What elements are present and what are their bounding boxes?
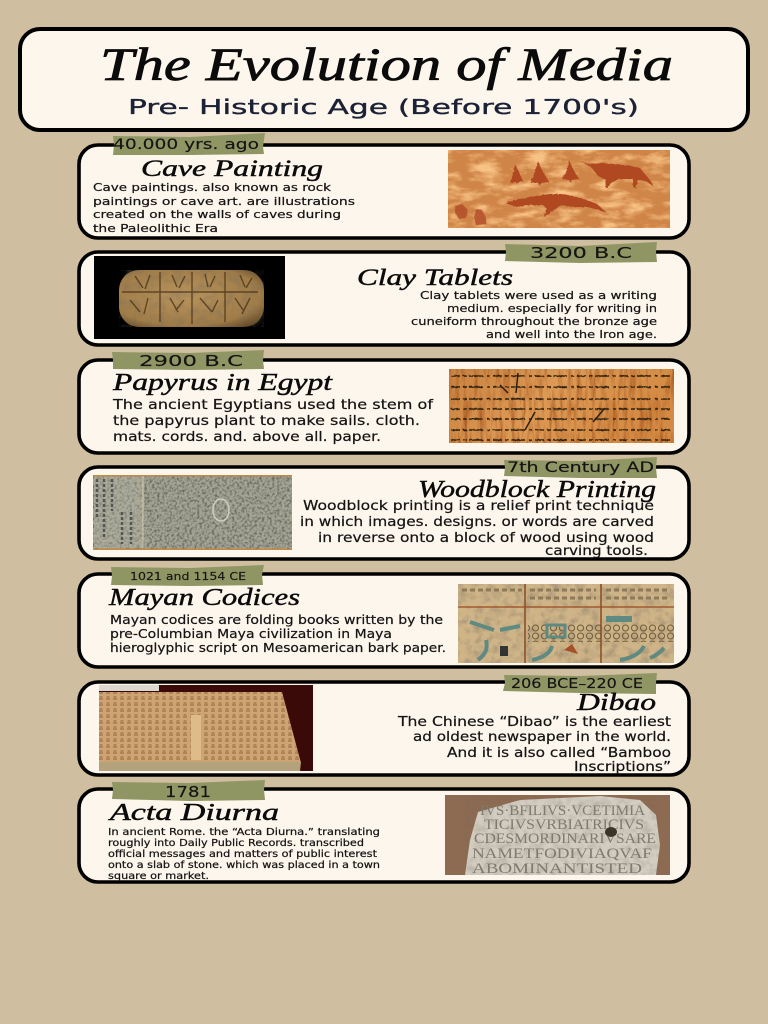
text: Dibao description: ad oldest newspaper in the world.: [413, 730, 671, 745]
date tag: 40,000 years ago: 40.000 yrs. ago: [113, 137, 259, 153]
text: cave painting description: paintings or cave art. are illustrations: [93, 195, 355, 208]
text: woodblock description: [300, 499, 654, 559]
date tag: 1021 and 1154 CE: [111, 565, 264, 586]
text: clay tablets description: medium. especially for writing in: [447, 302, 657, 315]
date tag: 206 BCE-220 CE: 206 BCE–220 CE: [511, 677, 643, 692]
image: Dibao bamboo slips: [99, 685, 313, 771]
date tag: 7th Century AD: [504, 457, 657, 478]
heading: woodblock printing: Woodblock Printing: [418, 477, 656, 503]
text: cave painting description: the Paleolithic Era: [93, 222, 218, 235]
text: cave painting description: [93, 181, 355, 235]
panel: Mayan codices: [79, 565, 689, 667]
text: clay tablets description: cuneiform throughout the bronze age: [411, 315, 657, 328]
heading: Acta Diurna: Acta Diurna: [107, 800, 279, 826]
image: cave painting: [448, 150, 670, 228]
text: Mayan codices description: [110, 613, 446, 655]
text: cave painting description: created on the walls of caves during: [93, 208, 341, 221]
text: Dibao description: [397, 715, 671, 775]
text: Mayan codices description: hieroglyphic script on Mesoamerican bark paper.: [110, 641, 446, 655]
text: Dibao description: Inscriptions”: [574, 760, 671, 775]
image: stone slab: NAMETFODIVIAQVAF: [472, 846, 652, 862]
panel: papyrus in Egypt: [79, 350, 689, 453]
image: stone slab: ABOMINANTISTED: [472, 861, 642, 877]
date tag: 40,000 years ago: [113, 133, 265, 155]
text: Acta Diurna description: square or market.: [108, 871, 209, 882]
text: clay tablets description: [411, 289, 657, 341]
text: Acta Diurna description: [108, 827, 380, 882]
text: papyrus description: the papyrus plant to make sails. cloth.: [113, 413, 420, 429]
image: clay tablet: [94, 256, 285, 339]
text: papyrus description: The ancient Egyptians used the stem of: [112, 397, 434, 413]
date tag: 1781: [112, 780, 265, 801]
heading: papyrus in Egypt: Papyrus in Egypt: [112, 370, 334, 396]
panel: woodblock printing: [79, 457, 689, 559]
heading: cave painting: Cave Painting: [141, 156, 323, 181]
date tag: 1021 and 1154 CE: 1021 and 1154 CE: [130, 570, 246, 583]
text: woodblock description: Woodblock printing is a relief print technique: [303, 499, 654, 514]
heading: Mayan codices: Mayan Codices: [108, 585, 300, 611]
text: clay tablets description: and well into the Iron age.: [486, 328, 657, 341]
text: Mayan codices description: Mayan codices are folding books written by the: [110, 613, 443, 627]
date tag: 3200 B.C: 3200 B.C: [530, 244, 632, 262]
date tag: 1781: 1781: [165, 783, 211, 801]
panel: cave painting: [79, 133, 689, 238]
text: Mayan codices description: pre-Columbian Maya civilization in Maya: [110, 627, 392, 641]
image: woodblock print: [93, 475, 292, 550]
text: papyrus description: mats. cords. and. above all. paper.: [113, 429, 381, 445]
panel: Acta Diurna: [79, 780, 689, 882]
date tag: 7th Century AD: 7th Century AD: [507, 460, 654, 476]
text: Dibao description: The Chinese “Dibao” is the earliest: [397, 715, 671, 730]
image: stone slab: CDESMORDINARIVSARE: [474, 831, 656, 847]
text: woodblock description: carving tools.: [545, 544, 648, 559]
header panel: [20, 29, 748, 130]
title: The Evolution of Media: [100, 39, 673, 91]
text: clay tablets description: Clay tablets were used as a writing: [420, 289, 657, 302]
date tag: 3200 B.C: [505, 242, 657, 263]
text: Acta Diurna description: roughly into Daily Public Records. transcribed: [108, 838, 364, 849]
heading: Dibao: Dibao: [576, 690, 656, 716]
image: Mayan codex: [458, 584, 674, 663]
image: stone slab: TICIVSVRBIATRICIVS: [484, 817, 644, 833]
text: papyrus description: [112, 397, 434, 445]
text: Dibao description: And it is also called “Bamboo: [447, 746, 671, 761]
text: Acta Diurna description: onto a slab of stone. which was placed in a town: [108, 860, 380, 871]
image: papyrus: [449, 369, 674, 443]
text: Acta Diurna description: official messages and matters of public interest: [108, 849, 377, 860]
image: stone slab: IVS·BFILIVS·VCETIMIA: [480, 803, 645, 819]
heading: clay tablets: Clay Tablets: [357, 265, 513, 290]
text: cave painting description: Cave paintings. also known as rock: [93, 181, 332, 194]
panel: clay tablets: [79, 242, 689, 345]
date tag: 206 BCE-220 CE: [503, 673, 657, 694]
image: stone slab: [445, 795, 670, 877]
text: woodblock description: in which images. designs. or words are carved: [300, 515, 654, 530]
date tag: 2900 B.C: 2900 B.C: [139, 352, 243, 370]
panel: Dibao: [79, 673, 689, 775]
text: woodblock description: in reverse onto a block of wood using wood: [318, 531, 654, 546]
subtitle: Pre- Historic Age (Before 1700's): [128, 95, 639, 119]
date tag: 2900 B.C: [112, 350, 264, 370]
text: Acta Diurna description: In ancient Rome. the “Acta Diurna.” translating: [108, 827, 380, 838]
